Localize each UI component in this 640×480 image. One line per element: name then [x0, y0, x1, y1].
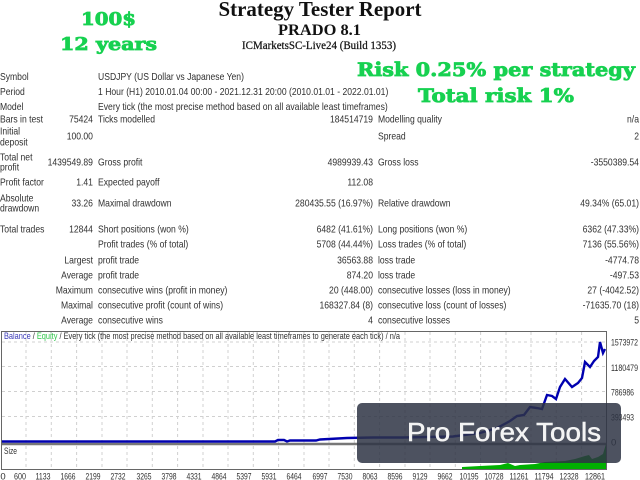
- report statistics table: [0, 71, 640, 326]
- report statistics table: 1 Hour (H1) 2010.01.04 00:00 - 2021.12.31 20:00 (2010.01.01 - 2022.01.01): [98, 86, 388, 97]
- report statistics table: 874.20: [347, 270, 373, 281]
- watermark badge: Pro Forex Tools: [407, 417, 601, 447]
- green note: deposit and duration: 100$: [81, 9, 136, 30]
- report statistics table: 4: [368, 315, 373, 326]
- report statistics table: 6362 (47.33%): [583, 224, 639, 235]
- report statistics table: Bars in test: [0, 114, 43, 125]
- report statistics table: Initial: [0, 126, 20, 137]
- report statistics table: 100.00: [67, 131, 93, 142]
- report statistics table: USDJPY (US Dollar vs Japanese Yen): [98, 71, 244, 82]
- report statistics table: drawdown: [0, 203, 39, 214]
- report statistics table: Short positions (won %): [98, 224, 189, 235]
- volume bars: [462, 444, 606, 469]
- green note: deposit and duration: [60, 9, 157, 55]
- report statistics table: Loss trades (% of total): [378, 239, 466, 250]
- report statistics table: Total trades: [0, 224, 45, 235]
- report statistics table: Largest: [64, 255, 93, 266]
- report statistics table: Expected payoff: [98, 177, 160, 188]
- report statistics table: n/a: [627, 114, 640, 125]
- report statistics table: 280435.55 (16.97%): [295, 198, 373, 209]
- report statistics table: profit trade: [98, 255, 139, 266]
- report title: ICMarketsSC-Live24 (Build 1353): [242, 38, 396, 52]
- report statistics table: Profit trades (% of total): [98, 239, 188, 250]
- report statistics table: consecutive wins (profit in money): [98, 285, 227, 296]
- report statistics table: loss trade: [378, 270, 415, 281]
- report statistics table: 5: [634, 315, 639, 326]
- report statistics table: consecutive wins: [98, 315, 163, 326]
- report statistics table: 4989939.43: [328, 157, 373, 168]
- report statistics table: Long positions (won %): [378, 224, 467, 235]
- report statistics table: consecutive loss (count of losses): [378, 300, 506, 311]
- report statistics table: 6482 (41.61%): [317, 224, 373, 235]
- report statistics table: Profit factor: [0, 177, 44, 188]
- green note: deposit and duration: 12 years: [60, 34, 157, 55]
- report statistics table: 12844: [69, 224, 93, 235]
- report statistics table: Total net: [0, 152, 33, 163]
- report statistics table: Absolute: [0, 193, 33, 204]
- report statistics table: 5708 (44.44%): [317, 239, 373, 250]
- report statistics table: loss trade: [378, 255, 415, 266]
- report statistics table: Period: [0, 86, 25, 97]
- report statistics table: Every tick (the most precise method based on all available least timeframes): [98, 101, 388, 112]
- report statistics table: 184514719: [330, 114, 373, 125]
- report statistics table: -4774.78: [605, 255, 639, 266]
- report title: PRADO 8.1: [278, 22, 361, 39]
- green note: risk: [357, 59, 636, 107]
- report statistics table: 112.08: [347, 177, 373, 188]
- report statistics table: Maximum: [56, 285, 93, 296]
- report statistics table: Symbol: [0, 71, 29, 82]
- panel divider: [2, 443, 606, 445]
- report statistics table: Maximal: [61, 300, 93, 311]
- report statistics table: 168327.84 (8): [319, 300, 373, 311]
- report statistics table: Maximal drawdown: [98, 198, 172, 209]
- report statistics table: Model: [0, 101, 23, 112]
- balance and equity chart: [0, 331, 638, 480]
- report statistics table: consecutive losses (loss in money): [378, 285, 511, 296]
- x axis labels: [0, 472, 605, 480]
- report title: [218, 0, 422, 52]
- report statistics table: -3550389.54: [591, 157, 639, 168]
- report statistics table: 1.41: [76, 177, 93, 188]
- y axis labels: [611, 338, 638, 448]
- report statistics table: profit: [0, 162, 19, 173]
- report statistics table: Modelling quality: [378, 114, 442, 125]
- report statistics table: Gross profit: [98, 157, 143, 168]
- report statistics table: -71635.70 (18): [583, 300, 639, 311]
- report statistics table: Gross loss: [378, 157, 419, 168]
- report statistics table: 33.26: [71, 198, 93, 209]
- size label: Size: [4, 446, 17, 457]
- report statistics table: profit trade: [98, 270, 139, 281]
- report statistics table: 36563.88: [337, 255, 373, 266]
- report statistics table: 75424: [69, 114, 93, 125]
- report statistics table: Average: [61, 315, 93, 326]
- watermark badge: [357, 403, 621, 463]
- report statistics table: Average: [61, 270, 93, 281]
- report statistics table: -497.53: [610, 270, 639, 281]
- green note: risk: Risk 0.25% per strategy: [357, 59, 636, 81]
- report statistics table: 27 (-4042.52): [587, 285, 639, 296]
- report statistics table: Relative drawdown: [378, 198, 451, 209]
- report statistics table: 49.34% (65.01): [580, 198, 639, 209]
- report statistics table: consecutive profit (count of wins): [98, 300, 223, 311]
- report statistics table: consecutive losses: [378, 315, 450, 326]
- balance curve: [2, 342, 605, 442]
- green note: risk: Total risk 1%: [418, 85, 574, 107]
- report statistics table: deposit: [0, 137, 28, 148]
- report statistics table: 20 (448.00): [329, 285, 373, 296]
- report statistics table: Spread: [378, 131, 406, 142]
- chart legend: Balance / Equity / Every tick (the most precise method based on all available least timeframes to generate each tick) / n/a: [4, 331, 401, 342]
- report statistics table: 7136 (55.56%): [583, 239, 639, 250]
- y axis labels: 0: [611, 438, 616, 448]
- report statistics table: 2: [634, 131, 639, 142]
- report statistics table: Ticks modelled: [98, 114, 155, 125]
- report statistics table: 1439549.89: [48, 157, 93, 168]
